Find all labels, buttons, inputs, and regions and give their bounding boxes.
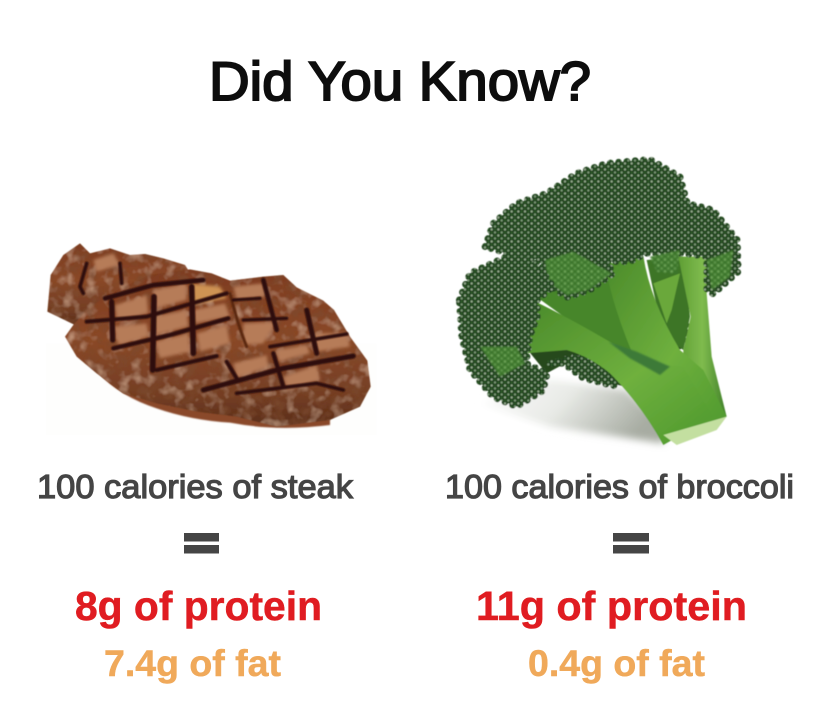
green inner floret tufts: [545, 250, 733, 295]
broccoli fat: 0.4g of fat: [528, 643, 705, 684]
rear florets: [550, 297, 687, 386]
front body of steak: [65, 269, 371, 427]
steak fat: 7.4g of fat: [104, 643, 281, 684]
left floret: [459, 255, 553, 407]
inner branch fill: [532, 260, 663, 370]
lower left stem: [525, 301, 713, 445]
broccoli protein: 11g of protein: [476, 583, 747, 629]
rear piece of steak: [47, 243, 197, 325]
illustration: broccoli: [459, 159, 738, 445]
ground shadow: [480, 380, 667, 443]
stem shading: [608, 342, 670, 375]
title: Did You Know?: [209, 50, 591, 112]
column: steak nutrition: [37, 468, 354, 684]
panel: steak: [46, 243, 377, 435]
broccoli calorie label: 100 calories of broccoli: [445, 468, 794, 505]
illustration: grilled steak: [46, 243, 377, 435]
equals sign: [184, 533, 219, 554]
steak meat: [47, 243, 371, 427]
steak protein: 8g of protein: [75, 583, 322, 629]
rear stem fill between branches: [647, 257, 690, 350]
panel: broccoli: [459, 159, 738, 445]
grill marks: [80, 263, 353, 393]
steak calorie label: 100 calories of steak: [37, 468, 354, 505]
equals sign: [613, 533, 649, 554]
steak plate backdrop: [46, 343, 377, 435]
green tuft on left floret: [480, 347, 525, 377]
central stem: [605, 256, 727, 438]
column: broccoli nutrition: [445, 468, 794, 684]
pale bright highlights on the meat: [93, 253, 350, 390]
cut end of the stalk: [663, 417, 727, 445]
juice shadow: [97, 372, 330, 428]
dark undergrowth beneath the left stem: [525, 347, 625, 387]
main crown floret: [485, 159, 738, 297]
right stem and trunk: [678, 257, 727, 430]
